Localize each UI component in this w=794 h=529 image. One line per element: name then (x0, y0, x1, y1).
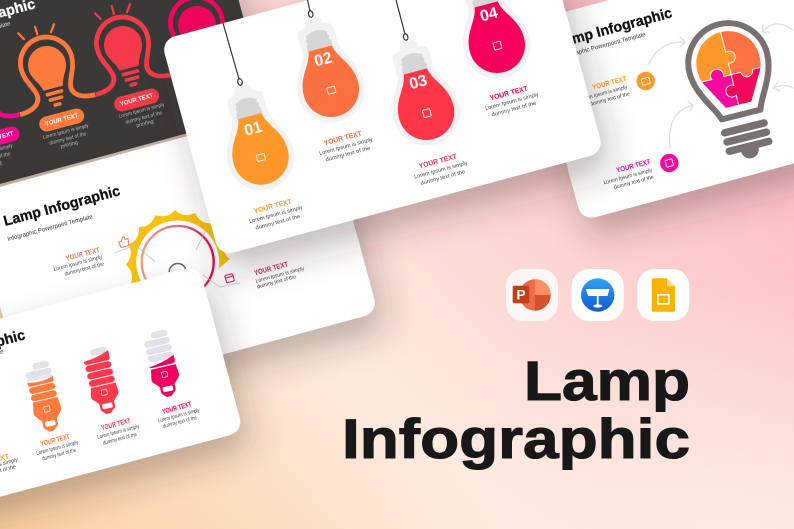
text block: orange column: Lorem Ipsum is simply (36, 440, 79, 457)
text block: orange column (36, 432, 79, 462)
text block: item 04: dummy text of the (491, 101, 537, 118)
text block: gauge right: dummy text of the (257, 274, 297, 290)
text block: orange column: printing (60, 140, 79, 150)
label pill: red (113, 87, 161, 113)
text block: orange column: dummy text of the (49, 131, 87, 147)
text block: gauge right (253, 259, 305, 290)
icon: hanging bulb 04 (452, 0, 531, 79)
heading: gauge slide title: Lamp Infographic (2, 183, 122, 230)
text block: pink column: Lorem Ipsum is simply (157, 407, 201, 424)
icon: red bulb rays (95, 4, 130, 19)
icon: magenta outline bulb (0, 48, 19, 135)
text block: red column: YOUR TEXT (100, 416, 132, 432)
icon: hanging bulb 03 (382, 39, 461, 146)
label pill: orange: YOUR TEXT (44, 112, 79, 128)
label pill: red: YOUR TEXT (119, 92, 154, 108)
hanging wires (223, 0, 409, 86)
text block: pink column: YOUR TEXT (161, 399, 193, 416)
arrows: curved pointers (648, 24, 793, 148)
text block: orange column: YOUR TEXT (39, 432, 71, 448)
icon: Keynote app (572, 269, 624, 321)
main title (342, 349, 690, 470)
panel: dark lamp slide (0, 0, 269, 215)
icon: magenta circle badge (658, 152, 681, 174)
text block: item 03: YOUR TEXT (418, 151, 458, 170)
icon: orange spiral bulb (23, 360, 66, 434)
panel: hanging bulbs slide (161, 0, 604, 256)
text block: gauge right: Lorem Ipsum is simply (255, 266, 305, 285)
text block: item 01: Lorem Ipsum is simply (249, 205, 304, 225)
text block: item 02 (319, 128, 374, 163)
text block: gauge left: dummy text of the (64, 261, 105, 278)
text block: magenta label: dummy text of the (613, 174, 655, 191)
number 01: 01 (243, 119, 264, 140)
text block: item 03: dummy text of the (420, 169, 466, 187)
text block: orange label: Lorem Ipsum is simply (578, 85, 628, 103)
text block: orange column: dummy text of the (42, 448, 77, 462)
icon: red outline bulb (78, 8, 172, 96)
label pill: magenta (0, 125, 21, 151)
icon: hanging bulb 02 (286, 16, 365, 123)
icon: pink outline bulb (152, 0, 245, 75)
text block: orange label: YOUR TEXT (591, 74, 628, 92)
text block: gauge right: YOUR TEXT (253, 259, 290, 277)
icon: PowerPoint app (506, 269, 558, 321)
text block: red column: Lorem Ipsum is simply (97, 424, 140, 441)
text block: item 01: dummy text of the (255, 214, 301, 232)
main title: Infographic (342, 407, 690, 470)
text block: yellow column (0, 451, 19, 481)
icon: pink spiral bulb (141, 329, 183, 400)
gauge pointer lines (115, 232, 240, 287)
text block: red column (97, 416, 140, 447)
icon: thumbs up (118, 236, 130, 248)
text block: red column: printing (136, 119, 154, 129)
heading: puzzle slide title: Lamp Infographic (554, 5, 674, 52)
number 03: 03 (408, 72, 429, 93)
text block: gauge left: Lorem Ipsum is simply (53, 254, 103, 273)
icon: orange circle badge (634, 70, 657, 92)
text block: pink column: dummy text of the (162, 415, 198, 430)
text block: orange label (578, 74, 631, 108)
text block: item 04 (485, 83, 540, 118)
icon: hanging bulb 01 (216, 84, 295, 191)
sun gauge (123, 207, 232, 304)
text block: item 04: YOUR TEXT (489, 83, 529, 102)
text block: orange column (43, 123, 90, 150)
puzzle slide subtitle: Infographic Powerpoint Template (560, 31, 647, 61)
gauge slide subtitle: Infographic Powerpoint Template (7, 213, 94, 243)
icon: red spiral bulb (81, 346, 123, 417)
icon: calendar (225, 274, 234, 283)
main title: Lamp (524, 349, 690, 412)
text block: magenta column (0, 143, 14, 170)
text block: item 01 (249, 196, 304, 232)
text block: item 04: Lorem Ipsum is simply (485, 92, 540, 112)
icon: PowerPoint app: P (516, 288, 526, 302)
text block: gauge left: YOUR TEXT (65, 245, 101, 263)
text block: item 03: Lorem Ipsum is simply (414, 160, 469, 181)
text block: item 03 (414, 151, 469, 187)
number 04: 04 (478, 4, 500, 26)
text block: item 02: Lorem Ipsum is simply (319, 137, 374, 157)
text block: magenta label (603, 157, 655, 191)
text block: magenta label: Lorem Ipsum is simply (603, 168, 653, 186)
icon: orange outline bulb (2, 28, 96, 116)
panel: spiral lamp slide (0, 265, 243, 509)
text block: red column: Lorem Ipsum is simply (118, 102, 165, 120)
label pill: orange (38, 107, 86, 133)
text block: item 01: YOUR TEXT (253, 196, 293, 215)
icon: puzzle lamp (685, 20, 772, 158)
text block: red column (118, 102, 165, 129)
text block: orange label: dummy text of the (589, 91, 631, 108)
panel: puzzle lamp slide (528, 0, 794, 221)
text block: red column: dummy text of the (102, 432, 138, 447)
icon: orange bulb rays (18, 24, 54, 39)
text block: orange column: Lorem Ipsum is simply (43, 123, 90, 141)
text block: item 02: YOUR TEXT (323, 128, 363, 147)
panel: gauge lamp slide (0, 100, 378, 407)
icon: Google Slides app (637, 269, 689, 321)
text block: pink column (157, 399, 201, 430)
text block: magenta label: YOUR TEXT (615, 157, 652, 175)
text block: gauge left (53, 245, 105, 278)
number 02: 02 (313, 49, 334, 71)
text block: red column: dummy text of the (125, 110, 163, 126)
text block: item 02: dummy text of the (325, 146, 371, 163)
